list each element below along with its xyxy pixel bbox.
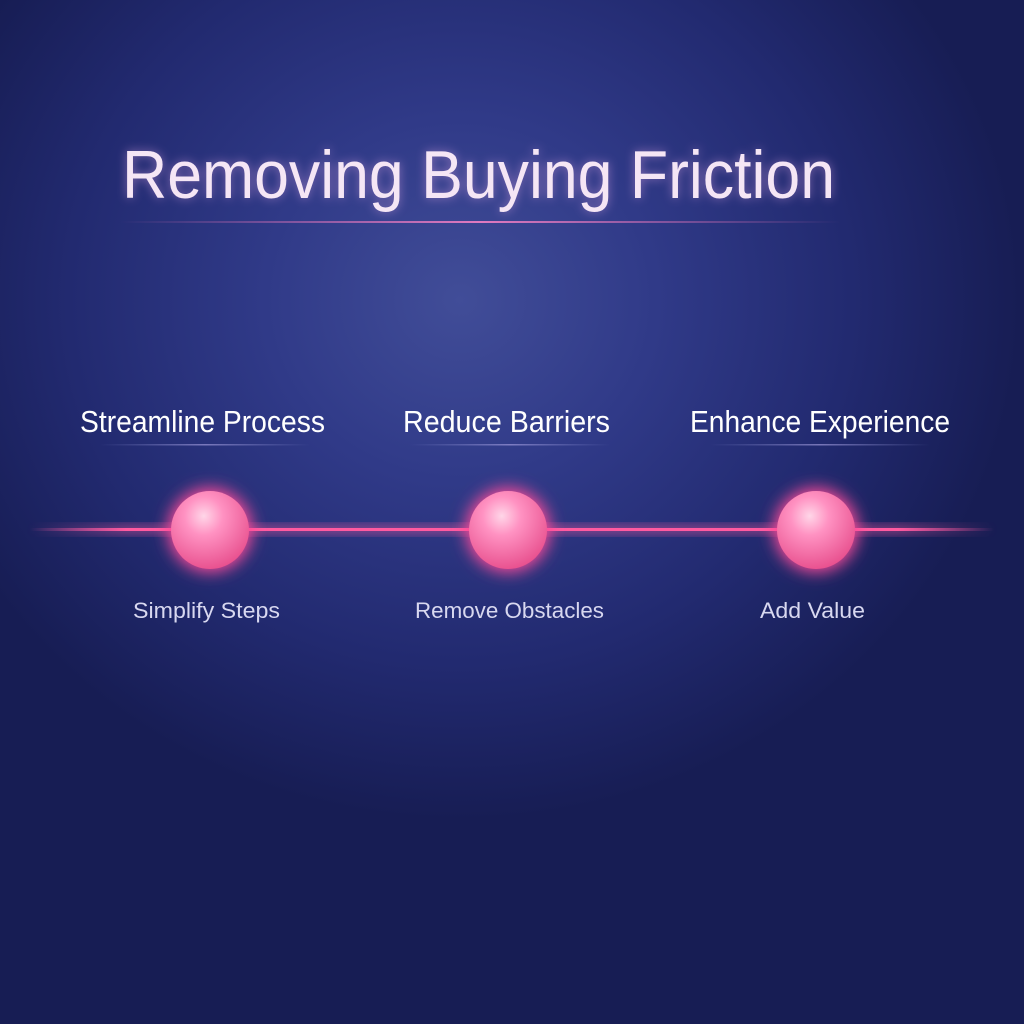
title: Removing Buying Friction xyxy=(122,137,835,213)
heading 3: Enhance Experience xyxy=(690,404,950,439)
node 2 xyxy=(466,488,550,572)
step 3 xyxy=(690,404,950,623)
step 1 xyxy=(80,404,325,623)
title: Removing Buying Friction xyxy=(122,137,835,213)
node 3 xyxy=(774,488,858,572)
label 3: Add Value xyxy=(760,598,865,623)
title underline xyxy=(120,221,840,223)
heading 2: Reduce Barriers xyxy=(403,404,610,439)
label 1: Simplify Steps xyxy=(133,598,280,623)
node 1 xyxy=(168,488,252,572)
label 2: Remove Obstacles xyxy=(415,598,604,623)
timeline line xyxy=(30,525,994,534)
step 2 xyxy=(403,404,610,623)
heading 1: Streamline Process xyxy=(80,404,325,439)
